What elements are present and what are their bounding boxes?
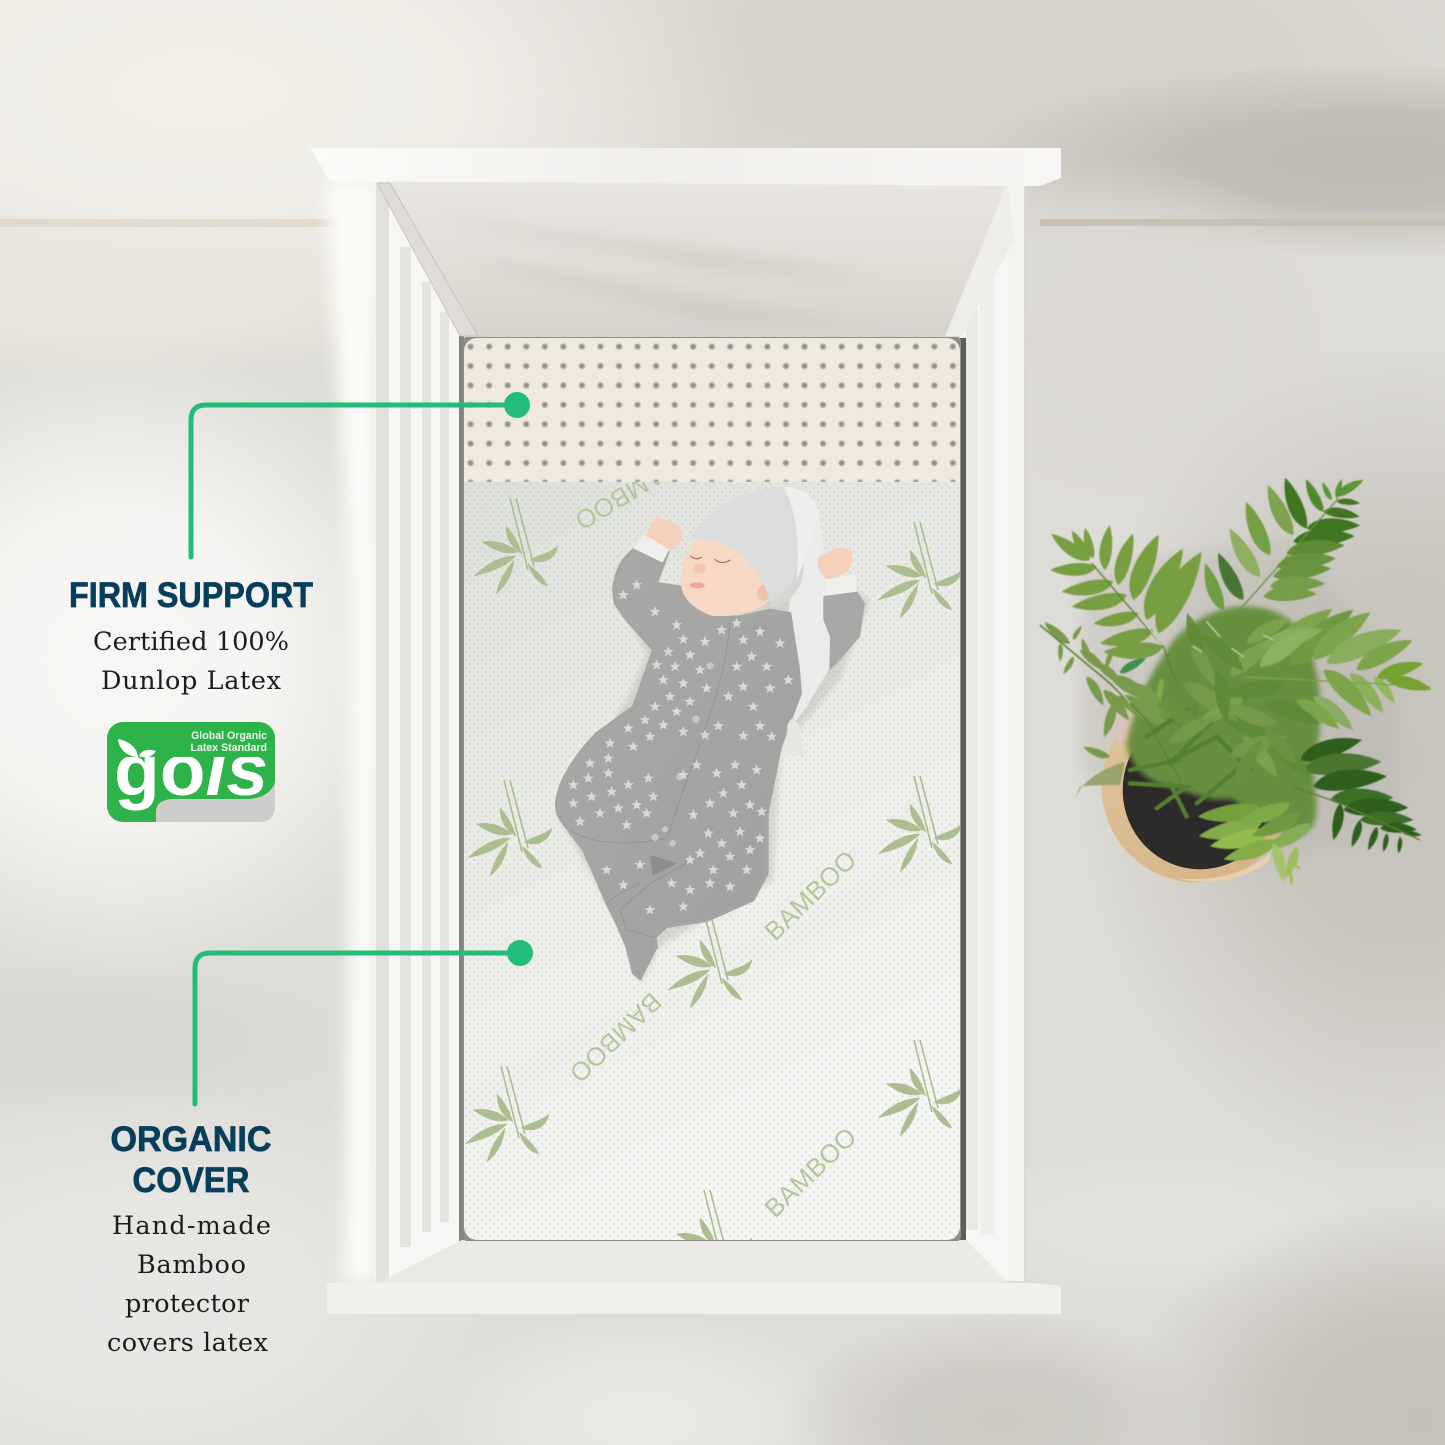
plant: [1040, 475, 1433, 883]
hat tip highlight: [783, 487, 819, 580]
baby: [556, 487, 870, 983]
baseboard line left: [0, 219, 354, 227]
bamboo word prints: [563, 451, 863, 1223]
bamboo word prints: BAMBOO: [758, 844, 863, 946]
ear: [757, 585, 771, 601]
dense foliage core: [1127, 606, 1320, 837]
callout line: organic cover: [195, 940, 533, 1104]
heading: firm support: FIRM SUPPORT: [69, 576, 313, 615]
leaf highlights: [1117, 617, 1273, 703]
text: bamboo protector: protector: [125, 1289, 250, 1319]
heading: organic cover: [110, 1120, 272, 1200]
hat body behind head: [770, 537, 804, 607]
text: bamboo protector: covers latex: [107, 1328, 269, 1358]
head panel left diagonal: [377, 183, 478, 336]
top shelf: [310, 148, 1061, 186]
bottom shelf: [327, 1283, 1061, 1314]
bamboo word prints: BAMBOO: [563, 987, 668, 1089]
left cuff: [633, 534, 669, 563]
icon: GOLS badge: [107, 722, 275, 822]
gap between legs: [650, 855, 677, 876]
onesie stars: [568, 579, 794, 915]
text: certified latex: [93, 627, 289, 696]
text: bamboo protector: [107, 1211, 271, 1358]
badge caption: Global Organic: [191, 730, 267, 742]
right cuff: [825, 574, 857, 596]
text: bamboo protector: Bamboo: [137, 1250, 246, 1280]
bamboo word prints: BAMBOO: [570, 451, 684, 536]
crib right side panel: [958, 183, 1027, 1281]
crib: [310, 148, 1061, 1314]
tassel: [781, 718, 804, 756]
hat tail: [788, 512, 832, 721]
heading: organic cover: COVER: [132, 1161, 250, 1200]
drooping tip: [1075, 762, 1125, 798]
hat: [690, 487, 818, 602]
baseboard line right: [1040, 219, 1445, 226]
badge leaves: [118, 739, 156, 757]
frond: top right: [1198, 475, 1365, 613]
head panel right diagonal: [945, 183, 1014, 336]
central leaves: [1154, 611, 1323, 786]
frond: lower right: [1293, 730, 1422, 854]
heading: organic cover: ORGANIC: [110, 1120, 272, 1159]
mattress shadow edge: [463, 337, 961, 1241]
bamboo cover: [464, 451, 962, 1286]
frond: right: [1243, 597, 1433, 734]
badge caption: Latex Standard: [190, 742, 267, 754]
badge grey corner: [156, 782, 275, 822]
frond: bottom: [1196, 798, 1314, 883]
mattress: [464, 338, 962, 1286]
head: [681, 536, 772, 616]
bamboo word prints: BAMBOO: [758, 1121, 863, 1223]
latex layer: [464, 338, 960, 482]
crib left side panel: [375, 183, 465, 1281]
badge caption: [190, 730, 267, 754]
bottom inner rail: [378, 1240, 1008, 1283]
pot: [1102, 691, 1292, 882]
left hand: [646, 518, 683, 551]
head panel shadows: [440, 215, 900, 330]
right sleeve: [823, 591, 865, 671]
badge wordmark: gols: [114, 731, 268, 811]
frond: left: [1040, 619, 1180, 780]
text: certified latex: Certified 100%: [93, 627, 289, 657]
frond: top left: [1047, 524, 1210, 683]
bamboo sprig prints: [465, 498, 962, 1286]
onesie snaps: [651, 662, 714, 847]
text: certified latex: Dunlop Latex: [101, 666, 282, 696]
pink pot rim reflection: [1110, 683, 1177, 747]
stems over soil: [1130, 710, 1250, 817]
onesie: [556, 548, 801, 979]
callout line: firm support: [191, 392, 530, 557]
crib side glow: [325, 182, 378, 1282]
sleeping eyes, nose and lips: [690, 556, 730, 588]
right hand: [818, 548, 852, 579]
text: bamboo protector: Hand-made: [112, 1211, 271, 1241]
plant shadow: [1080, 537, 1397, 870]
baby shadow: [557, 580, 870, 983]
onesie shading: [570, 620, 730, 937]
crib head panel: [378, 182, 1008, 337]
